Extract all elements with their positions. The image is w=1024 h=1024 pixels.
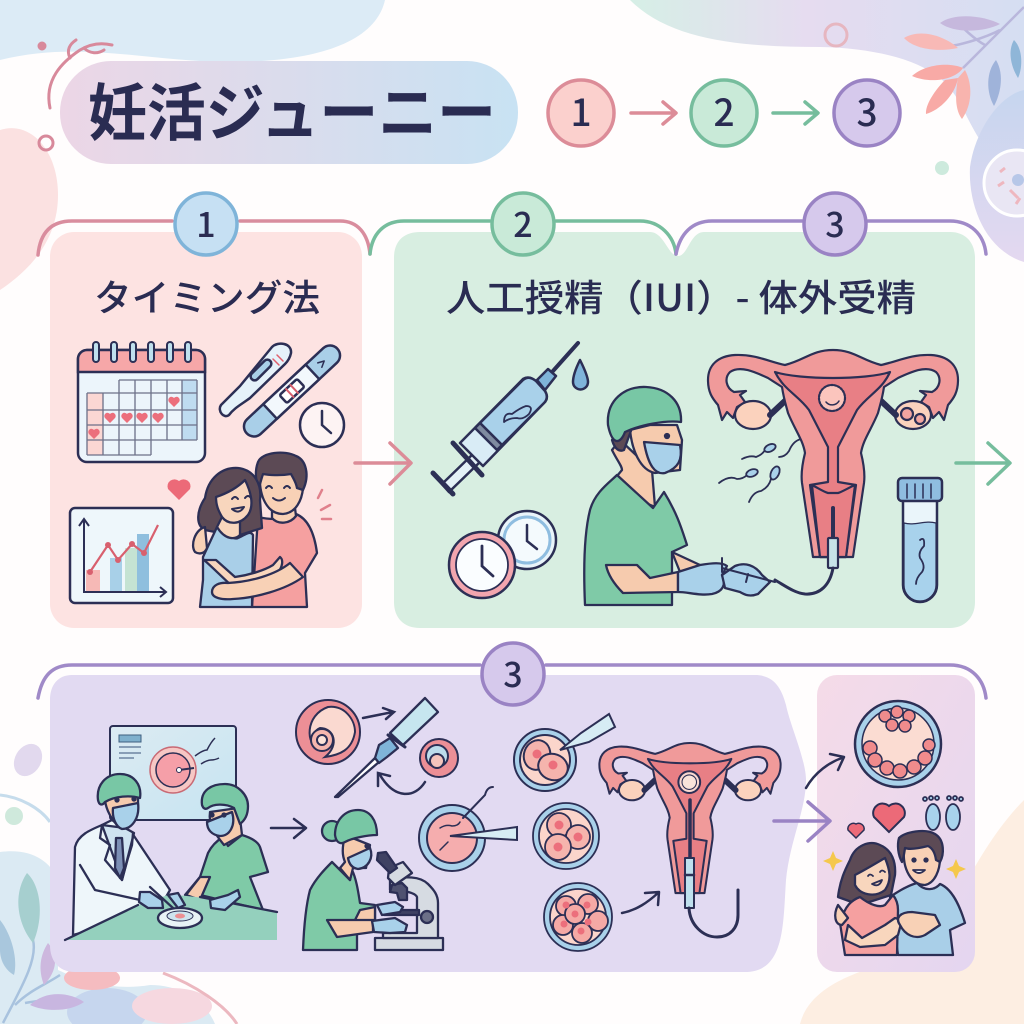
icon: heart	[167, 479, 191, 500]
heading: timing method: タイミング法	[94, 268, 320, 322]
illustration: happy couple	[193, 453, 331, 607]
panel 1 background	[50, 232, 362, 628]
step badge 1	[175, 193, 237, 255]
icon: small clock	[300, 403, 344, 447]
illustration: uterus	[708, 350, 958, 594]
bracket line panel 3	[38, 665, 986, 698]
panel 3 background	[50, 675, 806, 972]
illustration: egg cell	[378, 739, 458, 794]
arrow: embryo to uterus	[622, 892, 659, 913]
decorative sprig top left	[39, 40, 112, 150]
arrow: staff to lab	[271, 819, 306, 838]
step badge 2	[492, 193, 554, 255]
icon: transfer catheter	[685, 800, 738, 937]
illustration: uterus with transfer catheter	[599, 743, 781, 893]
illustration: doctor with catheter	[584, 387, 775, 605]
icon: pregnancy test	[240, 341, 344, 441]
illustration: ICSI injection	[419, 787, 517, 871]
illustration: sperm	[719, 429, 815, 502]
icon: retrieval needle	[335, 698, 438, 797]
panel 4 background	[817, 675, 975, 972]
illustration: couple with baby news	[835, 831, 965, 955]
top step indicator: 1	[570, 83, 592, 137]
illustration: lab screen	[110, 726, 236, 820]
step badge 3: 3	[825, 198, 845, 247]
illustration: embryologist with microscope	[303, 810, 443, 950]
icon: thermometer	[220, 344, 291, 416]
decorative leaves bottom left	[0, 795, 237, 1024]
illustration: embryo stage 3	[544, 883, 612, 951]
top step indicator: 2	[713, 83, 735, 137]
illustration: embryo stage 1	[514, 714, 615, 791]
icon: calendar	[78, 342, 205, 462]
decorative leaves top right	[825, 7, 1024, 216]
bracket lines	[38, 221, 986, 255]
arrow: to blastocyst	[806, 754, 844, 788]
arrow: panel 3 to panel 4	[774, 802, 830, 841]
arrow: step 2 to step 3	[956, 443, 1010, 484]
top step indicator	[548, 80, 900, 146]
title pill: 妊活ジューニー	[88, 63, 496, 153]
step badge 2: 2	[513, 198, 533, 247]
step badge 3	[804, 193, 866, 255]
illustration: egg with arrow	[296, 700, 394, 764]
icon: two clocks	[449, 511, 556, 598]
illustration: embryo stage 2	[533, 803, 599, 869]
step badge 1: 1	[196, 198, 216, 247]
step badge 3 lower	[482, 643, 544, 705]
icon: hearts and footprints	[823, 796, 966, 879]
illustration: two medical staff at table	[65, 774, 277, 940]
step badge 3 lower: 3	[503, 648, 523, 697]
illustration: blastocyst	[855, 701, 941, 787]
arrow: step 1 to step 2	[355, 443, 411, 484]
icon: syringe	[433, 343, 588, 494]
top step indicator: 3	[856, 83, 878, 137]
icon: test tube	[898, 478, 942, 602]
chart: temperature graph	[70, 508, 173, 603]
panel 2 background	[394, 232, 975, 628]
heading: IUI and IVF: 人工授精（IUI）- 体外受精	[446, 268, 916, 322]
